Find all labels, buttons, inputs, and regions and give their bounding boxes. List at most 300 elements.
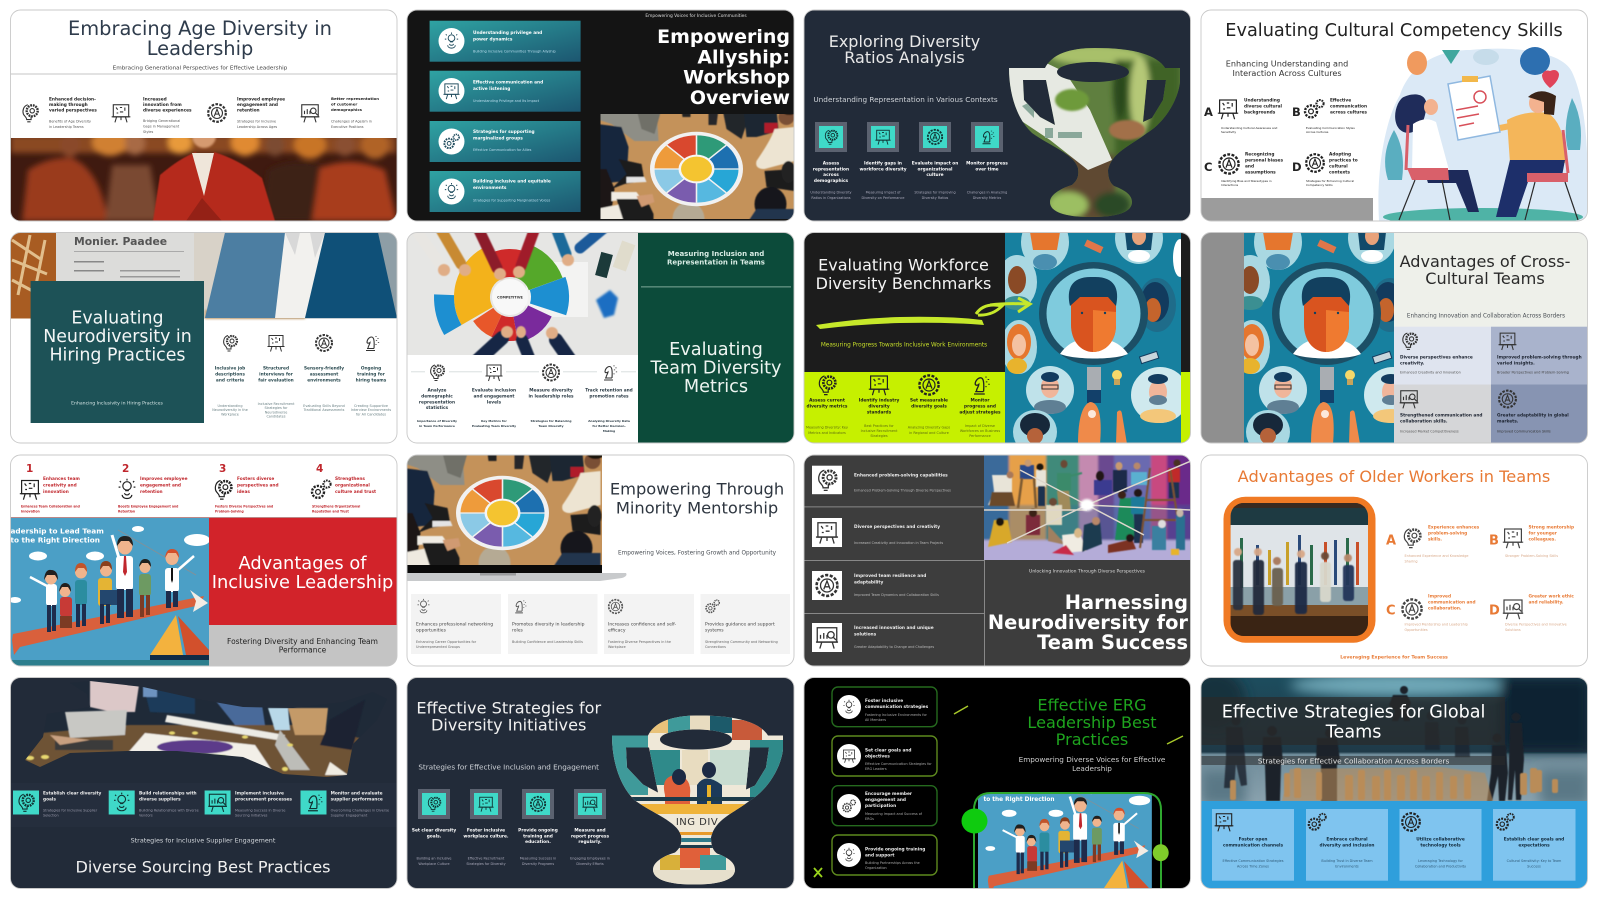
advantage 1: Enhances Team Collaboration and bbox=[21, 504, 80, 508]
step: standards: Strategies bbox=[870, 434, 888, 438]
quadrant: adaptability: markets. bbox=[1497, 418, 1519, 424]
item C: Recognizing bbox=[1245, 152, 1274, 158]
item C bbox=[1204, 152, 1283, 187]
quadrant: creativity: Diverse perspectives enhance bbox=[1400, 354, 1473, 360]
card: member engagement: engagement and bbox=[865, 797, 906, 803]
card: communication bbox=[430, 71, 581, 112]
item: procurement bbox=[205, 790, 292, 818]
trophy mosaic bbox=[608, 712, 788, 887]
item A: Enhanced Experience and Knowledge bbox=[1404, 554, 1468, 558]
item A bbox=[1386, 524, 1480, 564]
item: innovation: Bridging Generational bbox=[143, 119, 180, 123]
metric: retention: promotion rates bbox=[589, 393, 629, 399]
card: ongoing training: Organization bbox=[865, 866, 887, 870]
title: Workshop bbox=[683, 67, 790, 89]
step: culture: Strategies for Diversity bbox=[466, 862, 506, 866]
card: goals and expectations bbox=[1493, 809, 1576, 881]
card: cultural diversity: Environments bbox=[1335, 864, 1359, 868]
card: networking: opportunities bbox=[416, 628, 447, 634]
step: training: Provide ongoing bbox=[518, 828, 558, 834]
title block: Advantages of bbox=[239, 553, 367, 574]
step: identify gaps: Diversity on Performance bbox=[862, 196, 904, 200]
step: standards: Inclusive Recruitment bbox=[861, 429, 898, 433]
step: monitor: Diversity Metrics bbox=[973, 196, 1001, 200]
item D: practices to bbox=[1329, 158, 1358, 164]
step: measure: Diversity Efforts bbox=[576, 862, 604, 866]
card: privilege: Building Inclusive Communities Through Allyship bbox=[473, 50, 556, 54]
step: evaluate impact: culture bbox=[926, 172, 944, 178]
photo: women in red blazers bbox=[10, 138, 397, 220]
metric: demographic: in Team Performance bbox=[419, 424, 455, 428]
item: relationships: Building Relationships with Diverse bbox=[139, 808, 199, 812]
advantage 3: Problem-Solving bbox=[215, 510, 244, 514]
card: guidance: Connections bbox=[705, 645, 726, 649]
card: member engagement: ERGs bbox=[865, 817, 874, 821]
advantage 4: Strengthens Organizational bbox=[312, 504, 360, 508]
item D: Strategies for Enhancing Cultural bbox=[1306, 179, 1354, 183]
step: goals bbox=[412, 789, 456, 866]
step: measure bbox=[570, 789, 610, 866]
item C: C bbox=[1386, 604, 1396, 618]
lime brush stroke and arrow bbox=[816, 298, 1030, 329]
item: retention: Leadership Across Ages bbox=[237, 125, 277, 129]
card: communication strategies: All Members bbox=[865, 718, 886, 722]
grey footer block bbox=[1201, 198, 1373, 222]
item D: Solutions bbox=[1505, 628, 1521, 632]
item D: Competency Skills bbox=[1306, 183, 1333, 187]
item: decision-making: Benefits of Age Diversity bbox=[49, 120, 91, 124]
quadrant: adaptability bbox=[1491, 384, 1588, 444]
step: culture: workplace culture. bbox=[463, 833, 509, 839]
quadrant: communication: collaboration skills. bbox=[1400, 418, 1448, 424]
step: training bbox=[518, 789, 558, 866]
right green column: Measuring Inclusion and bbox=[668, 250, 764, 258]
metric: leadership: Team Diversity bbox=[538, 424, 564, 428]
subtitle: Strategies for Effective Inclusion and Engagement bbox=[418, 762, 599, 772]
card: equitable environments: Building inclusive and equitable bbox=[473, 178, 551, 184]
title block: Evaluating bbox=[71, 308, 164, 328]
step: metrics: diversity metrics bbox=[807, 404, 848, 410]
quadrant: communication bbox=[1394, 384, 1491, 444]
item: perspectives bbox=[812, 518, 943, 547]
advantage 3 bbox=[215, 463, 279, 514]
item: retention: engagement and bbox=[237, 102, 278, 108]
card: communication strategies bbox=[832, 687, 937, 727]
item: supplier performance: Overcoming Challenges in Diverse bbox=[331, 808, 389, 812]
advantage 4: Strengthens bbox=[335, 476, 365, 482]
footer caption: Leveraging Experience for Team Success bbox=[1340, 654, 1448, 660]
item: problem solving: Enhanced Problem-Solving Through Diverse Perspectives bbox=[854, 488, 951, 492]
metric: inclusion: Evaluate inclusion bbox=[472, 388, 516, 394]
item A: backgrounds bbox=[1244, 110, 1276, 116]
panel: Diverse Sourcing Best Practices bbox=[10, 678, 397, 888]
item B: Stronger Problem-Solving Skills bbox=[1505, 554, 1558, 558]
step: monitor bbox=[959, 377, 1001, 438]
card: cultural diversity bbox=[1306, 809, 1388, 881]
item: relationships bbox=[109, 790, 199, 818]
item A: Experience enhances bbox=[1428, 524, 1480, 530]
step: identify gaps: Measuring Impact of bbox=[866, 190, 901, 194]
item: decision-making: in Leadership Teams bbox=[49, 125, 84, 129]
item C: Opportunities bbox=[1404, 628, 1428, 632]
item: job descriptions: Workplace bbox=[221, 412, 239, 416]
title: Evaluating Cultural Competency Skills bbox=[1225, 21, 1563, 41]
title: Effective Strategies for bbox=[416, 698, 601, 718]
card: leadership roles: roles bbox=[512, 628, 524, 634]
item: structured interviews: Neurodiverse bbox=[265, 410, 287, 414]
card: marginalized groups bbox=[430, 121, 581, 162]
item: retention bbox=[208, 96, 285, 129]
advantage 4: culture and trust bbox=[335, 489, 376, 495]
step: assess: representation bbox=[813, 166, 849, 172]
step: measure: Engaging Employees in bbox=[570, 856, 610, 860]
item: structured interviews: Inclusive Recruitment bbox=[258, 402, 295, 406]
item C: Identifying Bias and Stereotypes in bbox=[1221, 179, 1272, 183]
item B: B bbox=[1292, 105, 1301, 119]
photo: competitive wheel on table bbox=[407, 207, 638, 387]
advantage 4: Reputation and Trust bbox=[312, 510, 349, 514]
item: supplier performance: supplier performance bbox=[331, 796, 383, 802]
item D bbox=[1489, 594, 1574, 632]
item: procurement: procurement processes bbox=[235, 796, 292, 802]
right green column: Metrics bbox=[684, 377, 748, 397]
card: goals and expectations: Cultural Sensitivity: Key to Team bbox=[1507, 859, 1562, 863]
title: Embracing Age Diversity in bbox=[68, 17, 332, 40]
card: marginalized groups: Effective Communication for Allies bbox=[473, 148, 532, 152]
item: ongoing training bbox=[351, 336, 391, 416]
title overlay: Effective Strategies for Global bbox=[1222, 702, 1485, 722]
advantage 2: retention bbox=[140, 489, 163, 495]
item B bbox=[1292, 98, 1367, 134]
step: goals bbox=[908, 375, 950, 435]
title: Harnessing bbox=[1065, 591, 1188, 614]
item: ongoing training: Interview Environments bbox=[351, 408, 391, 412]
item: structured interviews: Structured bbox=[263, 366, 289, 372]
card: cultural diversity: Building Trust in Diverse Team bbox=[1321, 859, 1373, 863]
panel: Advantages of Cross-Cultural Teams bbox=[1201, 212, 1588, 454]
item C: collaboration. bbox=[1428, 606, 1462, 612]
step: evaluate impact bbox=[912, 122, 958, 200]
item C: assumptions bbox=[1245, 170, 1276, 176]
step: evaluate impact: Evaluate impact on bbox=[912, 160, 958, 166]
card: marginalized groups: Strategies for supporting bbox=[473, 129, 535, 135]
quadrant: creativity: creativity. bbox=[1400, 360, 1425, 366]
subtitle: Understanding Representation in Various Contexts bbox=[813, 95, 998, 104]
item: diversity goals bbox=[13, 790, 101, 818]
metric: leadership: in leadership roles bbox=[528, 393, 574, 399]
right green column bbox=[638, 232, 794, 444]
title block: Inclusive Leadership bbox=[212, 572, 393, 593]
item: sensory-friendly: Traditional Assessments bbox=[303, 408, 345, 412]
item: job descriptions: Neurodiversity in the bbox=[212, 408, 248, 412]
item: decision-making: varied perspectives bbox=[49, 108, 97, 114]
item: representation: Challenges of Ageism in bbox=[331, 120, 372, 124]
metric: inclusion bbox=[472, 361, 516, 428]
step: identify gaps: workforce diversity bbox=[859, 166, 907, 172]
illustration: team on arrow with green frame: to the Right Direction bbox=[984, 797, 1055, 803]
card: confidence: Workplace bbox=[608, 645, 626, 649]
step: identify gaps: Identify gaps in bbox=[864, 160, 902, 166]
item A: diverse cultural bbox=[1244, 104, 1283, 110]
card: leadership roles: Promotes diversity in leadership bbox=[512, 622, 585, 628]
step: goals: goals. bbox=[427, 833, 442, 839]
step: assess: demographics bbox=[814, 178, 849, 184]
item D: Diverse Perspectives and Innovative bbox=[1505, 622, 1567, 626]
title: Evaluating Workforce bbox=[818, 256, 989, 274]
metric: demographic: statistics bbox=[426, 405, 449, 411]
item B: B bbox=[1489, 534, 1499, 548]
item D bbox=[1292, 152, 1358, 187]
title: Minority Mentorship bbox=[616, 498, 778, 518]
advantage 3: perspectives and bbox=[237, 483, 279, 489]
metric: leadership: Strategies for Balancing bbox=[530, 419, 572, 423]
step: monitor: Impact of Diverse bbox=[965, 424, 995, 428]
item: ongoing training: Creating Supportive bbox=[354, 404, 388, 408]
card: leadership roles bbox=[508, 594, 598, 654]
item: ongoing training: hiring teams bbox=[356, 378, 387, 384]
item C: Interactions bbox=[1221, 183, 1239, 187]
card: communication channels: Across Time Zones bbox=[1237, 864, 1269, 868]
photo: competitive wheel on table: COMPETITIVE bbox=[497, 296, 523, 300]
illustration: team on rising arrow bbox=[0, 518, 212, 666]
panel: Evaluating Workforce Diversity Benchmarks bbox=[804, 212, 1190, 454]
item: resilience: adaptability bbox=[854, 580, 883, 586]
item: resilience: Improved Team Dynamics and Collaboration Skills bbox=[854, 593, 939, 597]
item: decision-making bbox=[23, 96, 97, 129]
item: problem solving bbox=[812, 466, 951, 494]
subtitle: Enhancing Understanding and bbox=[1226, 58, 1348, 68]
item: supplier performance bbox=[300, 790, 389, 818]
item: resilience: Improved team resilience and bbox=[854, 573, 926, 579]
right green column: Team Diversity bbox=[649, 358, 782, 378]
step: metrics: Measuring Diversity: Key bbox=[806, 426, 848, 430]
item: job descriptions bbox=[212, 336, 248, 416]
title: Leadership bbox=[147, 37, 253, 60]
magnifying glass illustration bbox=[1230, 212, 1422, 454]
metric: demographic: Importance of Diversity bbox=[417, 419, 457, 423]
item A: Understanding Cultural Awareness and bbox=[1221, 126, 1278, 130]
panel: Advantages of Inclusive Leadership bbox=[0, 455, 397, 666]
step: assess: Understanding Diversity bbox=[810, 190, 852, 194]
item C bbox=[1386, 594, 1476, 632]
item A: problem-solving bbox=[1428, 530, 1467, 536]
panel: Harnessing Neurodiversity for Team Success bbox=[804, 450, 1195, 666]
card: ongoing training: and support bbox=[865, 852, 894, 858]
item D: contexts bbox=[1329, 170, 1350, 176]
item: representation bbox=[301, 96, 379, 129]
step: standards bbox=[859, 376, 899, 438]
advantage 2: engagement and bbox=[140, 483, 181, 489]
panel: Evaluating Cultural Competency Skills bbox=[1201, 10, 1588, 226]
subtitle: Empowering Voices, Fostering Growth and Opportunity bbox=[618, 550, 777, 556]
quadrant: communication: Strengthened communication and bbox=[1400, 412, 1482, 418]
item C: Improved bbox=[1428, 594, 1451, 600]
advantage 2: 2 bbox=[122, 463, 129, 475]
step: measure: regularly. bbox=[578, 839, 602, 845]
quadrant: creativity bbox=[1394, 327, 1491, 384]
laptop photo bbox=[402, 447, 626, 581]
item: sensory-friendly bbox=[303, 335, 345, 412]
item B: Strong mentorship bbox=[1528, 524, 1574, 530]
title block bbox=[209, 518, 397, 625]
card: leadership roles: Building Confidence and Leadership Skills bbox=[512, 640, 583, 644]
item B: Across Cultures bbox=[1306, 130, 1329, 134]
item A: Sensitivity bbox=[1221, 130, 1236, 134]
step: training: Diversity Programs bbox=[522, 862, 554, 866]
item D: Adopting bbox=[1329, 152, 1351, 158]
card: member engagement: participation bbox=[865, 803, 896, 809]
item D: D bbox=[1292, 160, 1302, 174]
item: relationships: Build relationships with bbox=[139, 790, 197, 796]
step: metrics: Metrics and Indicators bbox=[808, 431, 846, 435]
item: diversity goals: Establish clear diversity bbox=[43, 790, 101, 796]
step: monitor: Monitor bbox=[971, 398, 990, 404]
card: equitable environments: environments bbox=[473, 185, 507, 191]
card: clear goals: objectives bbox=[865, 754, 890, 760]
card: networking: Underrepresented Groups bbox=[416, 645, 460, 649]
item: decision-making: making through bbox=[49, 102, 88, 108]
decorative green circles bbox=[814, 706, 1183, 877]
framed photo: team by bar chart bbox=[1224, 497, 1376, 643]
item: relationships: Vendors bbox=[139, 814, 153, 818]
card: privilege bbox=[430, 21, 581, 62]
subtitle block: Performance bbox=[279, 646, 327, 654]
subtitle: Leadership bbox=[1072, 764, 1112, 773]
step: monitor: Performance bbox=[969, 434, 991, 438]
item D: D bbox=[1489, 604, 1500, 618]
card: clear goals bbox=[832, 736, 937, 776]
item: job descriptions: Inclusive job bbox=[215, 366, 245, 372]
advantage 3: 3 bbox=[219, 463, 226, 475]
item: structured interviews: fair evaluation bbox=[258, 378, 294, 384]
step: goals: Set measurable bbox=[910, 398, 948, 404]
metric: inclusion: Key Metrics for bbox=[481, 419, 507, 423]
item: structured interviews: Candidates bbox=[266, 415, 286, 419]
item: innovation: Gaps in Management bbox=[143, 124, 180, 128]
card: technology tools: Leveraging Technology for bbox=[1418, 859, 1463, 863]
title overlay: Teams bbox=[1325, 722, 1381, 742]
item: innovation: Increased bbox=[143, 96, 167, 102]
quadrant: problem solving: Improved problem-solving through bbox=[1497, 354, 1582, 360]
illustration: team on arrow with green frame bbox=[974, 783, 1161, 900]
item: retention: Improved employee bbox=[237, 96, 285, 102]
item A bbox=[1204, 98, 1283, 134]
metric: inclusion: and engagement bbox=[474, 393, 514, 399]
step: metrics bbox=[806, 376, 848, 435]
item: innovation bbox=[812, 623, 934, 652]
item A: A bbox=[1204, 105, 1213, 119]
item: diversity goals: Strategies for Inclusive Supplier bbox=[43, 808, 98, 812]
item: procurement: Sourcing Initiatives bbox=[235, 814, 268, 818]
item B: across cultures bbox=[1330, 110, 1367, 116]
title: Diversity Initiatives bbox=[431, 716, 586, 734]
metric: demographic: Analyze bbox=[428, 388, 447, 394]
card: clear goals: Effective Communication Strategies for bbox=[865, 762, 932, 766]
step: standards: Identify industry bbox=[859, 398, 899, 404]
item B: communication bbox=[1330, 104, 1367, 110]
title: Effective ERG bbox=[1037, 696, 1147, 714]
title overlay bbox=[1201, 697, 1505, 745]
item: perspectives: Increased Creativity and Innovation in Team Projects bbox=[854, 541, 943, 545]
item: innovation: Greater Adaptability to Change and Challenges bbox=[854, 645, 934, 649]
card: member engagement: Measuring Impact and Success of bbox=[865, 812, 923, 816]
title: Team Success bbox=[1037, 631, 1188, 654]
step: goals: Set clear diversity bbox=[412, 828, 456, 834]
subtitle block: Fostering Diversity and Enhancing Team bbox=[227, 637, 378, 646]
item A: Understanding bbox=[1244, 98, 1280, 104]
card: technology tools: technology tools bbox=[1420, 843, 1461, 849]
metric: inclusion: Evaluating Team Diversity bbox=[472, 424, 516, 428]
step: monitor: Challenges in Analyzing bbox=[967, 190, 1007, 194]
card: clear goals: Set clear goals and bbox=[865, 748, 912, 754]
panel: Advantages of Older Workers in Teams bbox=[1201, 455, 1588, 666]
panel: Effective Strategies for Diversity Initiatives bbox=[407, 678, 794, 888]
top caption: Empowering Voices for Inclusive Communities bbox=[645, 13, 747, 19]
advantage 3: ideas bbox=[237, 489, 250, 495]
title: Neurodiversity for bbox=[988, 611, 1188, 634]
item: retention: retention bbox=[237, 108, 260, 114]
illustration: two people and a clipboard bbox=[1378, 47, 1588, 226]
item B: for younger bbox=[1528, 530, 1558, 536]
card: guidance: systems bbox=[705, 628, 724, 634]
quadrant: communication: Increased Market Competitiveness bbox=[1400, 430, 1459, 434]
panel: Effective ERG Leadership Best Practices bbox=[804, 678, 1190, 900]
metric: retention: Making bbox=[603, 429, 615, 433]
card: guidance: Strengthening Community and Networking bbox=[705, 640, 778, 644]
advantage 4: organizational bbox=[335, 483, 370, 489]
advantage 2 bbox=[118, 463, 188, 514]
card: networking: Enhancing Career Opportunities for bbox=[416, 640, 477, 644]
metric: leadership: Measure diversity bbox=[529, 388, 573, 394]
subtitle: Embracing Generational Perspectives for Effective Leadership bbox=[113, 66, 288, 72]
card: communication strategies: communication strategies bbox=[865, 704, 929, 710]
title block bbox=[31, 281, 204, 423]
item: sensory-friendly: Sensory-friendly bbox=[304, 366, 344, 372]
step: culture: Foster inclusive bbox=[467, 828, 505, 834]
card: goals and expectations: expectations bbox=[1518, 843, 1550, 849]
step: assess: Ratios in Organizations bbox=[811, 196, 851, 200]
quadrant: problem solving bbox=[1491, 327, 1588, 384]
trophy mosaic: ING DIV bbox=[676, 817, 718, 828]
title: Empowering Through bbox=[610, 480, 784, 498]
card: cultural diversity: diversity and inclusion bbox=[1320, 843, 1374, 849]
advantage 2: Improves employee bbox=[140, 476, 188, 482]
item: problem solving: Enhanced problem-solving capabilities bbox=[854, 472, 948, 478]
photo: support circle wheel bbox=[600, 114, 794, 219]
item: procurement: Measuring Success in Diverse bbox=[235, 808, 286, 812]
advantage 1: creativity and bbox=[43, 483, 77, 489]
step: standards: diversity bbox=[868, 404, 890, 410]
advantage 1: innovation bbox=[43, 489, 69, 495]
magnifying glass illustration bbox=[997, 212, 1189, 454]
item: retention: Strategies for Inclusive bbox=[237, 120, 276, 124]
card: technology tools: Collaboration and Productivity bbox=[1415, 864, 1466, 868]
card: guidance: Provides guidance and support bbox=[705, 622, 775, 628]
step: identify gaps bbox=[859, 122, 907, 200]
metric: retention: Track retention and bbox=[585, 388, 633, 394]
subtitle: Measuring Progress Towards Inclusive Work Environments bbox=[821, 342, 987, 348]
step: goals: Analyzing Diversity Gaps bbox=[908, 426, 950, 430]
card: privilege: power dynamics bbox=[473, 36, 513, 42]
quadrant: adaptability: Greater adaptability in global bbox=[1497, 412, 1569, 418]
card: communication: Effective communication and bbox=[473, 80, 543, 86]
metric: retention: Analyzing Diversity Data bbox=[588, 419, 630, 423]
metric: inclusion: levels bbox=[487, 399, 502, 405]
metric: demographic bbox=[417, 361, 457, 428]
item: innovation: Increased innovation and unique bbox=[854, 625, 934, 631]
item: supplier performance: Monitor and evaluate bbox=[331, 790, 383, 796]
title: Overview bbox=[690, 87, 790, 109]
